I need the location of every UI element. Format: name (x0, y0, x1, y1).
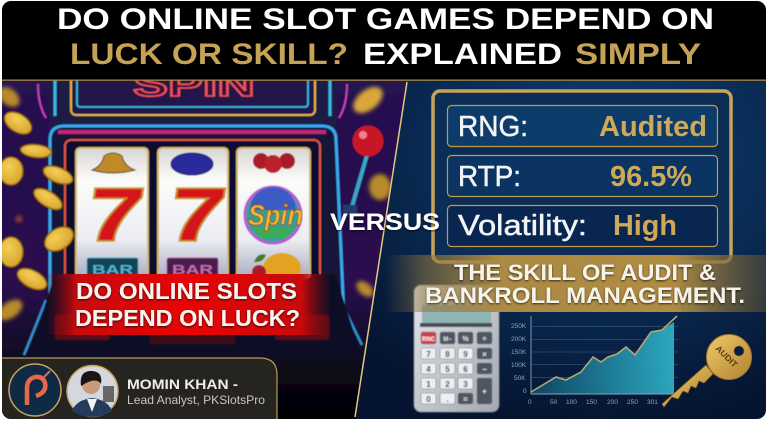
neon SPIN sign: SPIN (133, 66, 255, 103)
title band: SIMPLY (575, 38, 701, 71)
gold audit key: AUDIT (714, 343, 740, 370)
author name and role (128, 380, 264, 406)
row: RTP: RTP: (458, 161, 521, 193)
gold audit key (662, 334, 752, 407)
audit data frame (433, 91, 731, 262)
reel 1: BAR (92, 262, 134, 277)
growth line chart: 150 (586, 399, 597, 406)
callout band: depend on luck: DO ONLINE SLOTS (76, 278, 297, 304)
growth line chart: 250K (511, 323, 527, 330)
row: RTP: 96.5% (610, 161, 692, 193)
row: RNG: RNG: (458, 111, 528, 143)
calculator: = (463, 395, 468, 404)
reel 3: Spin (248, 200, 303, 232)
calculator: 1 (426, 380, 431, 389)
logo badge (9, 364, 61, 416)
calculator: 8 (445, 350, 450, 359)
title band: LUCK OR SKILL? (70, 38, 348, 71)
calculator: 3 (463, 380, 468, 389)
calculator: × (482, 350, 487, 359)
panel: skill audit background (355, 78, 768, 421)
growth line chart: 50K (514, 375, 526, 382)
VERSUS label: VERSUS (330, 209, 440, 236)
row: RNG (448, 106, 718, 146)
lever (343, 126, 384, 215)
panel: luck slot machine background (0, 66, 420, 421)
calculator: + (482, 387, 487, 396)
author name and role: MOMIN KHAN - (127, 376, 238, 392)
growth line chart: 0 (528, 399, 532, 406)
calculator: M− (443, 337, 452, 343)
callout band: skill of audit (385, 255, 768, 312)
growth line chart: 100K (511, 362, 527, 369)
growth line chart: 150K (511, 349, 527, 356)
callout band: depend on luck (48, 274, 330, 335)
calculator: 9 (463, 350, 468, 359)
calculator: . (446, 395, 449, 404)
blurred background coins (0, 82, 391, 325)
row: Volatility (448, 206, 718, 246)
gold diagonal divider (355, 82, 407, 417)
calculator: RNC (422, 337, 436, 343)
row: Volatility: Volatility: (458, 210, 587, 242)
calculator: % (462, 336, 469, 343)
reel 2: 7 (165, 173, 230, 256)
machine button deck (55, 315, 329, 344)
reel 2 (158, 148, 230, 278)
calculator: 7 (426, 350, 431, 359)
calculator: 2 (445, 380, 450, 389)
reel 1 (76, 148, 148, 278)
author card (0, 358, 277, 421)
reel 2: BAR (172, 262, 214, 277)
growth line chart: 301 (647, 399, 658, 406)
row: RTP (448, 156, 718, 196)
calculator: 5 (445, 365, 450, 374)
title band: DO ONLINE SLOT GAMES DEPEND ON (57, 3, 714, 36)
reel 1: 7 (83, 173, 148, 256)
calculator: 0 (426, 395, 431, 404)
calculator: 4 (426, 365, 431, 374)
growth line chart: 250 (627, 399, 638, 406)
calculator: 6 (463, 365, 468, 374)
callout band: depend on luck: DEPEND ON LUCK? (75, 305, 300, 331)
machine neon frame (24, 70, 362, 358)
author photo (67, 366, 118, 417)
title band (0, 0, 768, 81)
gold coins (0, 107, 78, 294)
growth line chart: 100 (566, 399, 577, 406)
callout band: skill of audit: THE SKILL OF AUDIT & (454, 260, 716, 285)
row: Volatility: High (613, 210, 677, 242)
title band: EXPLAINED (363, 38, 562, 71)
growth line chart: 50 (550, 399, 558, 406)
growth line chart: 200 (607, 399, 618, 406)
growth line chart: 200K (511, 336, 527, 343)
reel 3 (237, 148, 310, 283)
calculator (414, 285, 499, 412)
growth line chart: 0 (523, 388, 527, 395)
callout band: skill of audit: BANKROLL MANAGEMENT. (425, 283, 745, 308)
author name and role: Lead Analyst, PKSlotsPro (127, 393, 265, 407)
calculator: ÷ (482, 334, 487, 343)
calculator: − (482, 365, 487, 374)
row: RNG: Audited (599, 111, 707, 143)
growth line chart (511, 316, 678, 406)
